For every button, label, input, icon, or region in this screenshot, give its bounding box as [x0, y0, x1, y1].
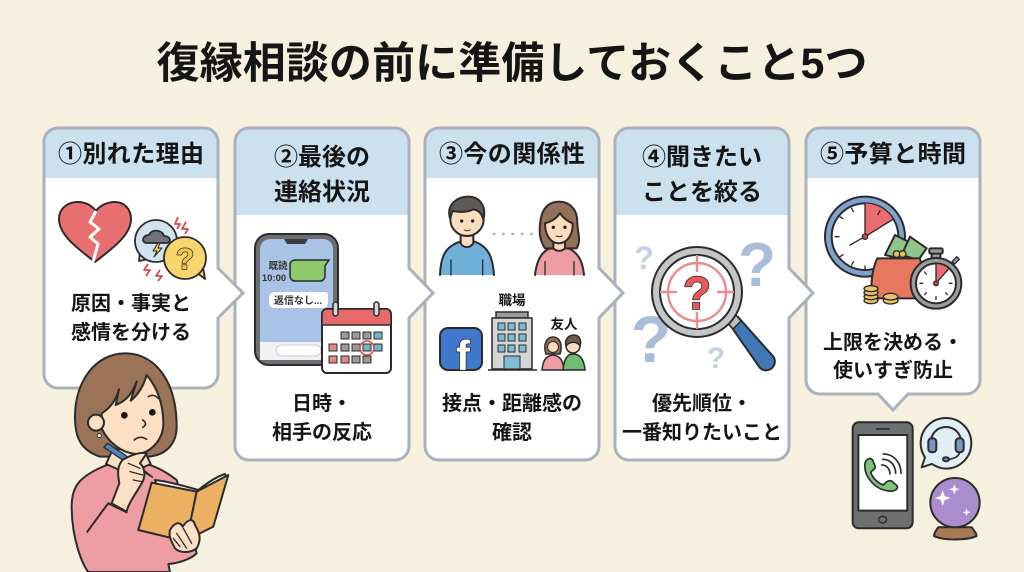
text: step 4 description — [622, 392, 782, 444]
title: 復縁相談の前に準備しておくこと5つ — [156, 40, 868, 88]
red question mark: ? — [683, 267, 711, 319]
icon: smartphone with chat — [255, 234, 338, 365]
heading: step 5: ⑤予算と時間 — [820, 141, 966, 168]
text: step 2 description — [272, 392, 372, 444]
heading: step 1: ①別れた理由 — [58, 141, 204, 168]
cuff — [108, 503, 127, 512]
icon: broken heart — [59, 202, 131, 262]
icon: question marks — [631, 231, 776, 376]
sweater — [72, 465, 197, 572]
heading: step 2 — [274, 144, 370, 206]
label: friends: 友人 — [550, 317, 578, 332]
text: step 1 description — [71, 292, 191, 344]
text: step 2 description: 日時・ — [292, 392, 352, 415]
heading: step 2: 連絡状況 — [274, 179, 370, 206]
heading: step 4: ④聞きたい — [642, 144, 762, 171]
label: workplace: 職場 — [498, 292, 526, 308]
icon: office building — [488, 312, 537, 370]
sleeve fold — [87, 503, 108, 532]
dotted link — [494, 230, 532, 238]
text: step 3 description: 接点・距離感の — [442, 391, 582, 415]
man — [440, 197, 494, 275]
panel: step 3 current relationship — [425, 128, 623, 460]
label: read time — [262, 260, 288, 284]
text: step 1 description: 原因・事実と — [71, 292, 191, 315]
icon: crystal ball — [930, 478, 980, 539]
signal waves — [882, 454, 901, 474]
label: read time: 既読 — [268, 260, 288, 272]
icon: storm and question bubbles: ? — [176, 243, 194, 276]
woman — [535, 202, 584, 275]
hand holding notebook — [170, 520, 200, 552]
hair — [75, 353, 177, 457]
icon: clock, purse and stopwatch — [825, 197, 961, 309]
text: step 4 description: 一番知りたいこと — [622, 421, 782, 444]
icon: man and woman with distance — [440, 197, 584, 275]
heading: step 4: ことを絞る — [642, 179, 762, 206]
icon: question marks: ? — [634, 240, 654, 276]
icon: question marks: ? — [738, 231, 776, 300]
purse — [871, 251, 924, 298]
text: step 1 description: 感情を分ける — [71, 320, 191, 344]
chat: no reply bubble: 返信なし... — [274, 294, 322, 307]
text: step 3 description — [442, 391, 582, 444]
heading: step 4 — [642, 144, 762, 206]
text: step 4 description: 優先順位・ — [652, 392, 752, 415]
label: read time: 10:00 — [262, 273, 286, 284]
target reticle — [660, 255, 734, 329]
text: step 2 description: 相手の反応 — [272, 421, 372, 444]
panel: step 5 budget and time — [806, 128, 980, 410]
hand and forearm — [112, 453, 147, 512]
icon: facebook: f — [456, 332, 471, 379]
notebook — [155, 474, 227, 495]
wall clock — [825, 197, 905, 277]
text: step 5 description: 上限を決める・ — [823, 331, 963, 354]
illustration: woman thinking with notebook — [72, 353, 228, 572]
face — [88, 375, 163, 454]
heading: step 2: ②最後の — [274, 144, 370, 171]
icon: magnifying glass — [652, 247, 775, 370]
icon: headset bubble — [921, 418, 971, 469]
icon: friends — [542, 335, 585, 370]
panel: step 2 last contact — [235, 128, 433, 460]
chat: green message bubble — [290, 260, 329, 281]
icon: question marks: ? — [631, 302, 671, 376]
text: step 3 description: 確認 — [492, 421, 532, 444]
icon: storm and question bubbles — [135, 217, 206, 281]
panel: step 4 narrowing questions — [615, 128, 813, 460]
icon: facebook — [440, 328, 482, 379]
panel: step 1 reason for breakup — [44, 128, 243, 388]
text: step 5 description: 使いすぎ防止 — [833, 358, 953, 382]
money bills — [885, 235, 927, 260]
neck — [106, 448, 151, 474]
icon: smartphone with call — [853, 422, 913, 528]
stopwatch — [911, 248, 961, 309]
pen — [104, 443, 153, 477]
icon: question marks: ? — [707, 342, 725, 375]
coins — [864, 286, 898, 304]
text: step 5 description — [823, 331, 963, 382]
heading: step 3: ③今の関係性 — [439, 141, 585, 168]
icon: calendar — [322, 302, 391, 373]
handset — [865, 459, 897, 491]
